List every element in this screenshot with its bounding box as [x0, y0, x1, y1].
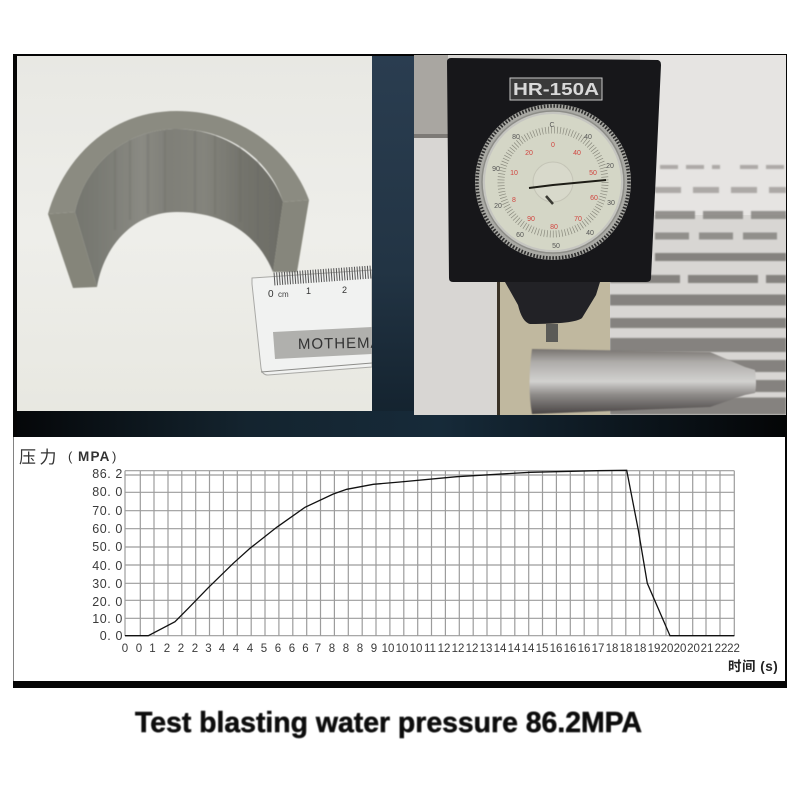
x-axis labels: 6 [275, 643, 281, 655]
dial: 0 [551, 142, 555, 149]
x-axis labels: 8 [357, 643, 363, 655]
x-axis labels: 9 [371, 643, 377, 655]
y-axis labels: 80. 0 [92, 485, 123, 499]
stand behind the gauge [497, 280, 610, 415]
dial: 40 [586, 230, 594, 237]
y-axis labels: 0. 0 [100, 629, 123, 643]
x-axis labels: 12 [452, 643, 464, 655]
x-axis labels: 17 [592, 643, 604, 655]
x-axis labels: 6 [302, 643, 309, 655]
x-axis labels: 2 [192, 643, 198, 655]
ruler: MOTHEMA [298, 335, 382, 353]
chart heading: pressure axis title: 压力 [19, 448, 60, 467]
ruler: cm [278, 290, 289, 299]
x-axis labels: 2 [178, 643, 184, 655]
caption: test blasting water pressure: Test blasting water pressure 86.2MPA [135, 707, 642, 739]
x-axis labels: 20 [674, 643, 686, 655]
x-axis labels: 10 [410, 643, 422, 655]
x-axis labels [122, 643, 740, 655]
ruler: 0 [268, 289, 274, 300]
dial [475, 104, 631, 260]
x-axis labels: 12 [438, 643, 450, 655]
x-axis labels: 14 [522, 643, 535, 655]
half-ring sample [48, 111, 309, 288]
gauge body [447, 58, 661, 282]
x-axis labels: 16 [578, 643, 590, 655]
x-axis labels: 4 [233, 643, 240, 655]
y-axis labels [92, 467, 123, 643]
dial: 20 [494, 203, 502, 210]
x-axis labels: 15 [536, 643, 548, 655]
dial: 50 [589, 170, 597, 177]
dial: 30 [607, 200, 615, 207]
chart heading: pressure axis title: MPA [78, 449, 111, 464]
chart heading: pressure axis title: ( [68, 449, 73, 464]
gas bottle [530, 349, 756, 414]
y-axis labels: 50. 0 [92, 540, 123, 554]
x-axis title: time: 时间 (s) [728, 659, 778, 674]
dial: 90 [527, 216, 535, 223]
chart heading: pressure axis title: ) [112, 449, 116, 464]
x-axis labels: 18 [634, 643, 646, 655]
x-axis labels: 3 [205, 643, 212, 655]
dial: 60 [590, 195, 598, 202]
y-axis labels: 60. 0 [92, 522, 123, 536]
ruler: 1 [306, 286, 311, 296]
dial: 40 [573, 150, 581, 157]
ruler [252, 270, 382, 375]
x-axis labels: 20 [661, 643, 673, 655]
x-axis labels: 4 [247, 643, 254, 655]
dial: 8 [512, 197, 516, 204]
x-axis labels: 22 [715, 643, 727, 655]
y-axis labels: 70. 0 [92, 504, 123, 518]
pressure curve [125, 470, 734, 636]
x-axis labels: 14 [508, 643, 521, 655]
ruler: 2 [342, 285, 347, 295]
dial: 70 [574, 216, 582, 223]
dial: 20 [525, 150, 533, 157]
x-axis labels: 16 [564, 643, 576, 655]
grid lines [125, 471, 734, 636]
x-axis labels: 11 [424, 643, 436, 655]
dial: 60 [516, 232, 524, 239]
x-axis labels: 12 [466, 643, 478, 655]
x-axis labels: 20 [687, 643, 700, 655]
x-axis labels: 8 [329, 643, 335, 655]
y-axis labels: 40. 0 [92, 559, 123, 573]
x-axis labels: 0 [122, 643, 128, 655]
dial: 10 [510, 170, 518, 177]
photo: half-ring aluminium sample with ruler [17, 56, 382, 411]
dial: 80 [550, 224, 558, 231]
x-axis labels: 18 [606, 643, 618, 655]
dial: 80 [512, 134, 520, 141]
x-axis labels: 13 [480, 643, 492, 655]
y-axis labels: 86. 2 [92, 467, 123, 481]
photo: hardness tester gauge and bottle [414, 55, 786, 415]
x-axis labels: 1 [149, 643, 156, 655]
x-axis labels: 22 [727, 643, 740, 655]
x-axis labels: 8 [343, 643, 349, 655]
chart panel: pressure over time [14, 437, 785, 681]
x-axis labels: 4 [219, 643, 226, 655]
x-axis labels: 0 [136, 643, 142, 655]
chart heading: pressure axis title [19, 448, 116, 467]
x-axis labels: 21 [701, 643, 713, 655]
x-axis labels: 6 [289, 643, 295, 655]
x-axis labels: 16 [550, 643, 562, 655]
black photo frame [13, 54, 787, 688]
dial: 50 [552, 243, 560, 250]
dial: C [549, 122, 555, 129]
x-axis labels: 18 [620, 643, 632, 655]
striped wall [610, 167, 786, 406]
indenter [505, 282, 600, 342]
x-axis labels: 14 [494, 643, 507, 655]
x-axis labels: 10 [382, 643, 394, 655]
x-axis labels: 19 [648, 643, 660, 655]
y-axis labels: 30. 0 [92, 577, 123, 591]
x-axis labels: 10 [396, 643, 408, 655]
dial: 90 [492, 166, 500, 173]
x-axis labels: 7 [315, 643, 321, 655]
x-axis labels: 5 [261, 643, 267, 655]
x-axis labels: 2 [164, 643, 170, 655]
y-axis labels: 20. 0 [92, 595, 123, 609]
y-axis labels: 10. 0 [92, 612, 123, 626]
HR-150A label: HR-150A [513, 79, 599, 99]
dial: 20 [606, 163, 614, 170]
dial: 40 [584, 134, 592, 141]
